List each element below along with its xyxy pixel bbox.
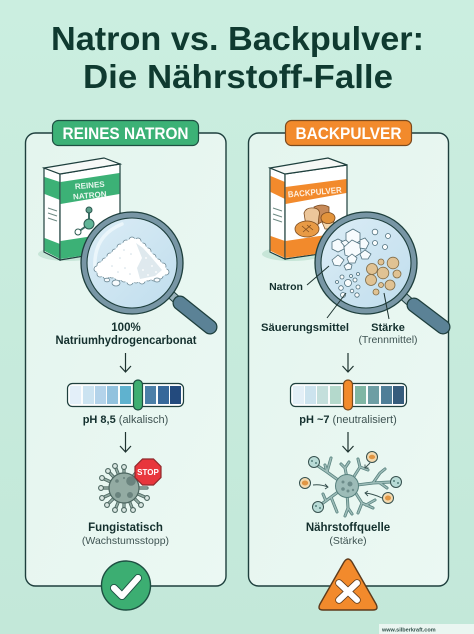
arrow [120,353,131,372]
icon: check mark [102,561,150,610]
icon: magnifier with ingredients [315,212,443,327]
icon: backpulver box [262,158,347,261]
panel: backpulver [248,120,448,610]
badge: backpulver [286,120,412,146]
icon: natron box [38,158,120,261]
label: Natron: Natron [269,281,303,293]
title: Natron vs. Backpulver: [51,21,424,58]
icon: fungus with stop sign [99,459,161,512]
text: pH 8,5: pH 8,5 (alkalisch) [83,414,168,426]
pH scale: 8,5 [68,380,184,410]
label: Stärke [358,293,418,346]
footer: website: www.silberkraft.com [381,628,436,634]
text: Nährstoffquelle: Nährstoffquelle [306,522,390,534]
badge: reines natron [52,120,198,146]
text: 100% Natriumhydrogencarbonat [56,322,197,347]
text: Fungistatisch: (Wachstumsstopp) [82,535,169,547]
icon: backpulver box: BACKPULVER [287,185,342,199]
text: 100% Natriumhydrogencarbonat: Natriumhydrogencarbonat [56,335,197,347]
footer: website [379,624,474,634]
label: Natron [269,266,329,293]
arrow [342,353,354,372]
icon: fungal mycelium with nutrients [300,452,402,516]
title: Die Nährstoff-Falle [83,59,393,96]
badge: backpulver: BACKPULVER [296,124,402,143]
icon: fungus with stop sign: STOP [137,468,159,477]
text: Nährstoffquelle: (Stärke) [329,535,367,547]
label: Stärke: Stärke [371,322,405,334]
panel: reines natron [26,120,226,610]
text: 100% Natriumhydrogencarbonat: 100% [111,322,141,334]
text: Nährstoffquelle [306,522,390,547]
arrow [120,432,131,452]
pH scale: ~7 [290,380,406,410]
label: Säuerungsmittel: Säuerungsmittel [261,322,349,334]
title [51,21,424,96]
text: pH ~7: pH ~7 (neutralisiert) [299,414,397,426]
label: Stärke: (Trennmittel) [358,334,418,346]
icon: natron box: REINES [75,180,106,191]
icon: natron box: NATRON [73,190,107,201]
label: Säuerungsmittel [261,293,349,334]
text: Fungistatisch [82,522,169,547]
icon: magnifier with powder [81,212,210,327]
icon: warning cross [319,559,377,610]
text: Fungistatisch: Fungistatisch [88,522,163,534]
arrow [342,432,354,452]
badge: reines natron: REINES NATRON [62,124,188,143]
